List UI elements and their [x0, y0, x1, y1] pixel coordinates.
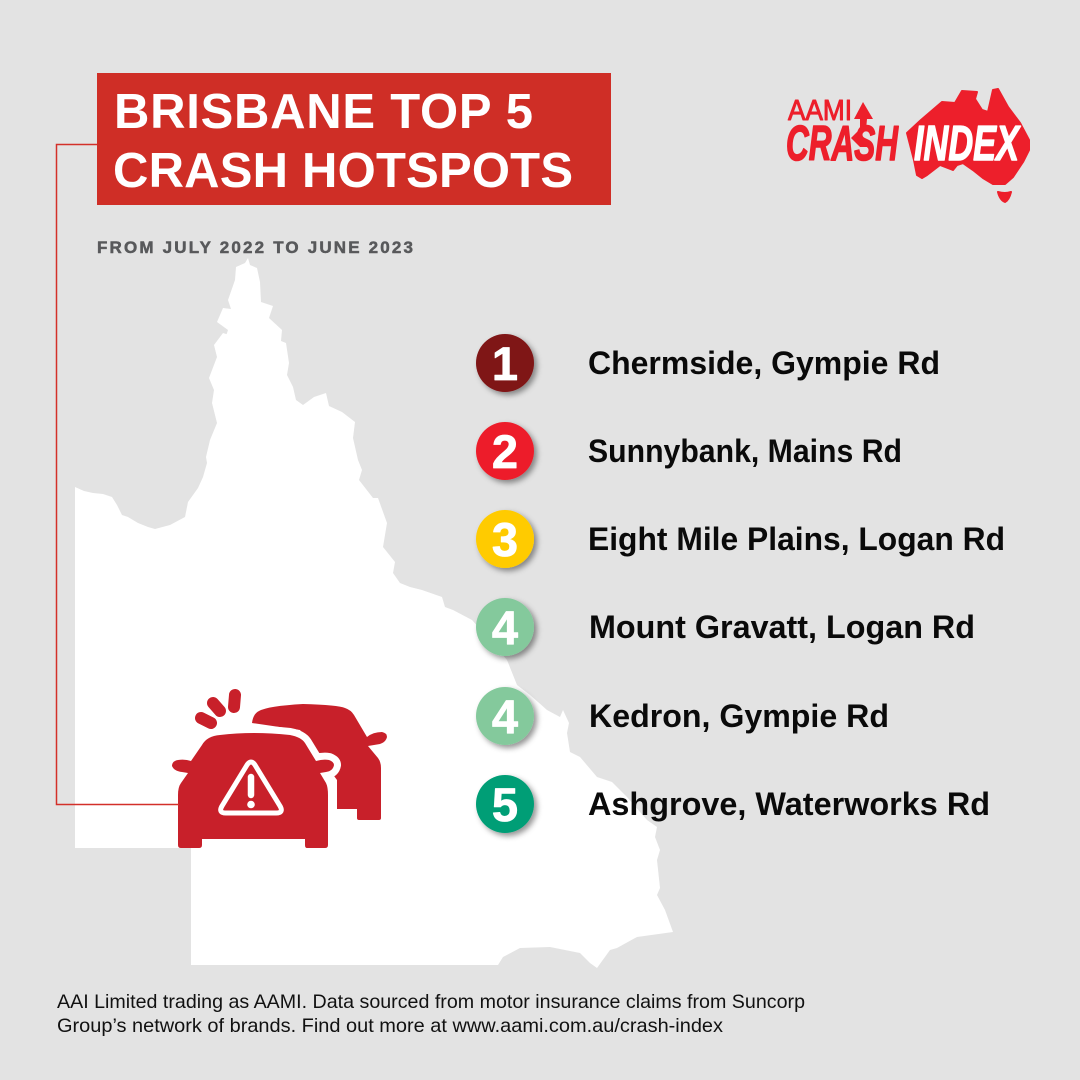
- rank badge 1: [476, 334, 534, 392]
- list item 4: [476, 598, 975, 656]
- warning triangle: [221, 762, 281, 813]
- footer note: Group’s network of brands. Find out more at www.aami.com.au/crash-index: [57, 1015, 723, 1037]
- rear car: [252, 704, 387, 820]
- rank badge 4 tied: [476, 687, 534, 745]
- title banner: [97, 73, 611, 205]
- rank badge 3: [476, 510, 534, 568]
- rank badge 4: 4: [492, 601, 518, 654]
- logo arrow: [851, 102, 873, 147]
- logo wordmark CRASH: CRASH: [786, 117, 899, 171]
- front car: [172, 733, 334, 848]
- rank badge 5: [476, 775, 534, 833]
- subtitle date range: FROM JULY 2022 TO JUNE 2023: [97, 238, 413, 257]
- rank badge 5: 5: [492, 778, 518, 831]
- footer note: AAI Limited trading as AAMI. Data sourced from motor insurance claims from Suncorp: [57, 991, 805, 1013]
- front car outline gap: [276, 726, 341, 776]
- rank badge 2: 2: [492, 425, 518, 478]
- icon: crashed cars with warning: [172, 695, 387, 848]
- title text line 2: CRASH HOTSPOTS: [113, 144, 573, 198]
- rank badge 4 tied: 4: [492, 690, 518, 743]
- list item 1: [476, 334, 940, 392]
- rank badge 3: 3: [492, 513, 518, 566]
- location 6: Ashgrove, Waterworks Rd: [588, 786, 990, 822]
- leader line: [56, 144, 179, 804]
- logo Australia shape: [907, 89, 1029, 202]
- list item 3: [476, 510, 1005, 568]
- location 2: Sunnybank, Mains Rd: [588, 433, 902, 469]
- location 3: Eight Mile Plains, Logan Rd: [588, 521, 1005, 557]
- list item 5: [476, 687, 889, 745]
- rank badge 2: [476, 422, 534, 480]
- rank badge 1: 1: [492, 337, 518, 390]
- impact marks: [201, 695, 235, 723]
- location 4: Mount Gravatt, Logan Rd: [589, 609, 975, 645]
- logo wordmark INDEX: INDEX: [914, 117, 1021, 171]
- list item 6: [476, 775, 990, 833]
- title text line 1: BRISBANE TOP 5: [114, 85, 533, 139]
- logo: AAMI Crash Index: [786, 89, 1029, 202]
- rank badge 4: [476, 598, 534, 656]
- map: Queensland silhouette: [75, 258, 673, 968]
- location 5: Kedron, Gympie Rd: [589, 698, 889, 734]
- list item 2: [476, 422, 902, 480]
- location 1: Chermside, Gympie Rd: [588, 345, 940, 381]
- footer note: [57, 991, 805, 1037]
- logo wordmark AAMI: AAMI: [788, 95, 852, 127]
